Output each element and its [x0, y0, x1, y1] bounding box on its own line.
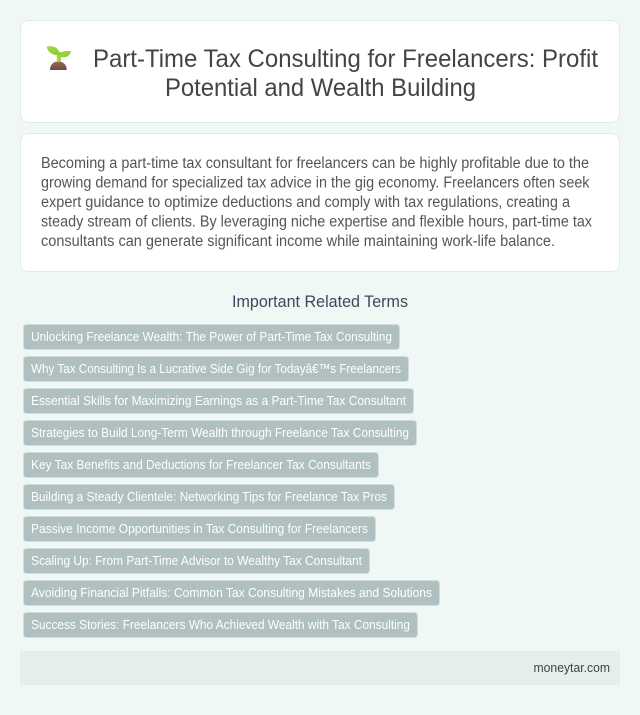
tag 8: Scaling Up: From Part-Time Advisor to Wealthy Tax Consultant: [31, 553, 362, 568]
tag 1: [24, 324, 400, 350]
tag 5: [24, 452, 378, 478]
tag 4: Strategies to Build Long-Term Wealth through Freelance Tax Consulting: [31, 425, 409, 440]
tag 1: Unlocking Freelance Wealth: The Power of Part-Time Tax Consulting: [31, 329, 392, 344]
panel: summary card: [20, 134, 620, 272]
summary text: consultants can generate significant income while maintaining work-life balance.: [41, 233, 555, 250]
tag 7: [24, 516, 376, 542]
summary text: expert guidance to optimize deductions and comply with tax regulations, creating a: [41, 194, 570, 211]
tag 2: Why Tax Consulting Is a Lucrative Side Gig for Todayâ€™s Freelancers: [31, 361, 401, 376]
tag 6: Building a Steady Clientele: Networking Tips for Freelance Tax Pros: [31, 489, 387, 504]
tag 4: [24, 420, 416, 446]
footer source text: moneytar.com: [534, 661, 610, 675]
tag list: [24, 324, 440, 638]
icon: seedling: [47, 46, 71, 70]
summary text: [41, 155, 592, 250]
tag 8: [24, 548, 370, 574]
tag 7: Passive Income Opportunities in Tax Consulting for Freelancers: [31, 521, 368, 536]
footer bar: [20, 651, 620, 685]
summary text: Becoming a part-time tax consultant for freelancers can be highly profitable due to the: [41, 155, 589, 172]
summary text: steady stream of clients. By leveraging niche expertise and flexible hours, part-time tax: [41, 214, 592, 230]
title text: Potential and Wealth Building: [165, 74, 476, 102]
title text: [93, 45, 598, 102]
tag 3: Essential Skills for Maximizing Earnings as a Part-Time Tax Consultant: [31, 393, 406, 408]
tag 10: [24, 612, 418, 638]
tag 2: [24, 356, 408, 382]
tag 3: [24, 388, 414, 414]
title text: Part-Time Tax Consulting for Freelancers: Profit: [93, 45, 598, 73]
tag 10: Success Stories: Freelancers Who Achieved Wealth with Tax Consulting: [31, 617, 410, 632]
heading: important related terms: Important Related Terms: [232, 293, 408, 311]
tag 6: [24, 484, 394, 510]
panel: title card: [20, 20, 620, 122]
tag 9: Avoiding Financial Pitfalls: Common Tax Consulting Mistakes and Solutions: [31, 585, 432, 600]
tag 9: [24, 580, 440, 606]
tag 5: Key Tax Benefits and Deductions for Freelancer Tax Consultants: [31, 457, 371, 472]
summary text: growing demand for specialized tax advice in the gig economy. Freelancers often seek: [41, 174, 590, 192]
